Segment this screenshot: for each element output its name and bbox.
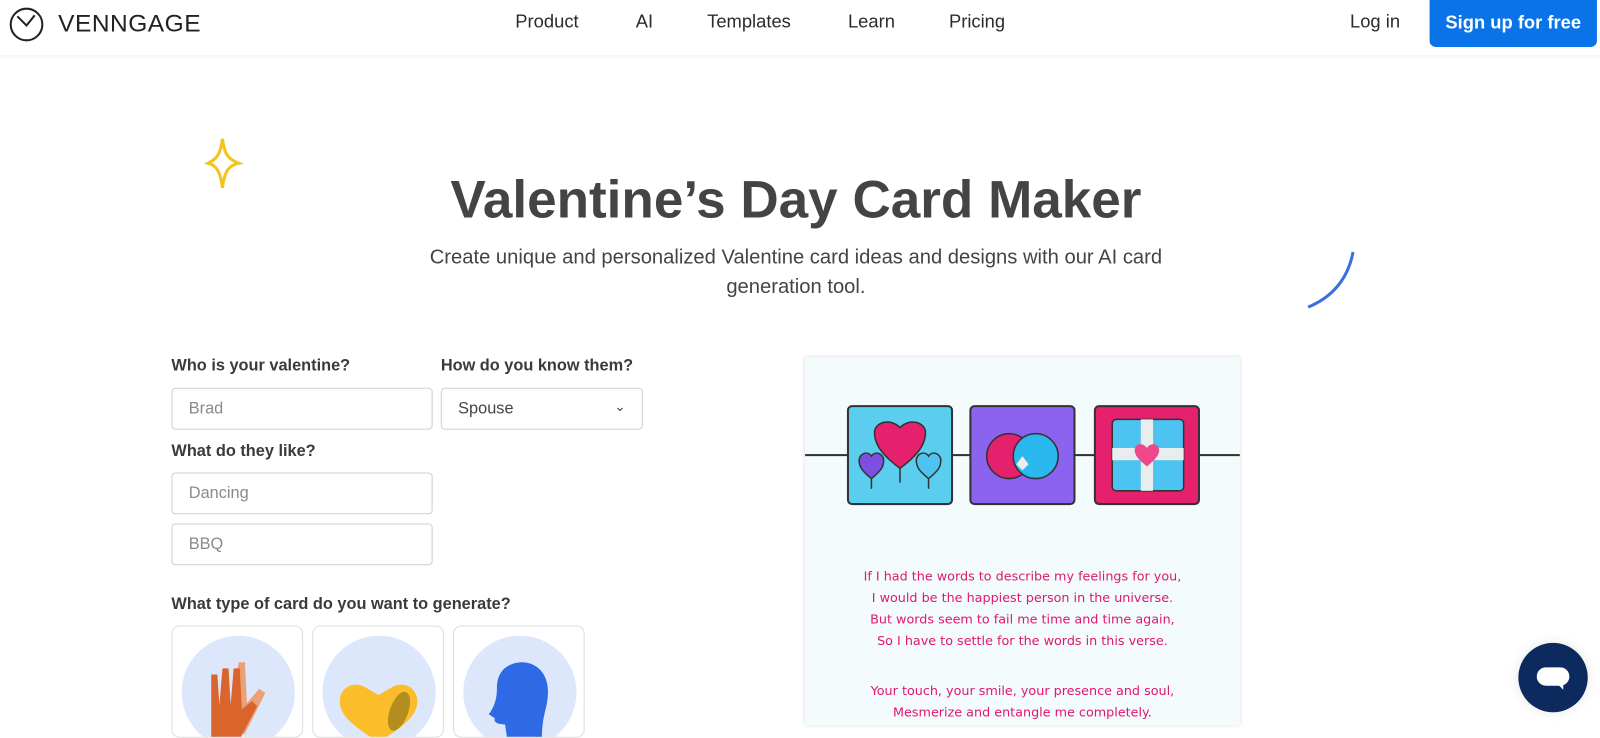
label: card type: What type of card do you want to generate? (171, 596, 511, 613)
subtitle: generation tool. (726, 276, 865, 298)
poem verse 1: If I had the words to describe my feelings for you, (864, 568, 1181, 584)
label: likes: What do they like? (171, 443, 316, 460)
poem verse 1: But words seem to fail me time and time again, (870, 611, 1175, 627)
input: like 2: BBQ (189, 536, 223, 553)
card preview (805, 357, 1240, 726)
select: relation (441, 388, 643, 430)
decoration: yellow star (204, 138, 244, 188)
log in: Log in (1350, 11, 1400, 32)
decoration: blue stroke (1308, 252, 1354, 308)
input: like 1: Dancing (189, 485, 249, 502)
poem verse 1: So I have to settle for the words in this verse. (877, 633, 1168, 648)
header (0, 0, 1600, 55)
nav links: Learn (848, 11, 895, 32)
card option: hands (171, 626, 303, 738)
logo: VENNGAGE (58, 10, 201, 38)
poem verse 2: Your touch, your smile, your presence and soul, (871, 683, 1174, 698)
nav links: Pricing (949, 11, 1005, 32)
label: valentine: Who is your valentine? (171, 357, 350, 374)
select: relation: Spouse (458, 400, 514, 417)
subtitle (430, 246, 1162, 298)
card option: head (453, 626, 585, 738)
title: Valentine’s Day Card Maker (450, 170, 1141, 230)
nav links (515, 11, 1005, 32)
nav links: AI (636, 11, 653, 32)
nav links: Product (515, 11, 579, 32)
nav links: Templates (707, 11, 791, 32)
card option: heart (312, 626, 444, 738)
input: name: Brad (189, 400, 223, 417)
connecting line (805, 454, 1240, 456)
icon: balloons (847, 405, 953, 505)
chat button (1518, 643, 1588, 712)
select: relation: ⌄ (614, 399, 626, 414)
poem verse 1 (864, 568, 1181, 648)
subtitle: Create unique and personalized Valentine card ideas and designs with our AI card (430, 246, 1162, 268)
poem verse 2: Mesmerize and entangle me completely. (893, 704, 1152, 719)
input: like 2 (171, 523, 433, 565)
poem verse 1: I would be the happiest person in the universe. (872, 590, 1173, 605)
input: name (171, 388, 433, 430)
poem verse 2 (870, 683, 1174, 719)
icon: gift (1094, 405, 1200, 505)
form (171, 357, 643, 738)
logo (10, 8, 201, 42)
icon: speech bubbles (969, 405, 1076, 505)
sign up button (1430, 0, 1597, 47)
input: like 1 (171, 472, 433, 514)
sign up button: Sign up for free (1445, 12, 1581, 33)
label: relation: How do you know them? (441, 357, 633, 374)
